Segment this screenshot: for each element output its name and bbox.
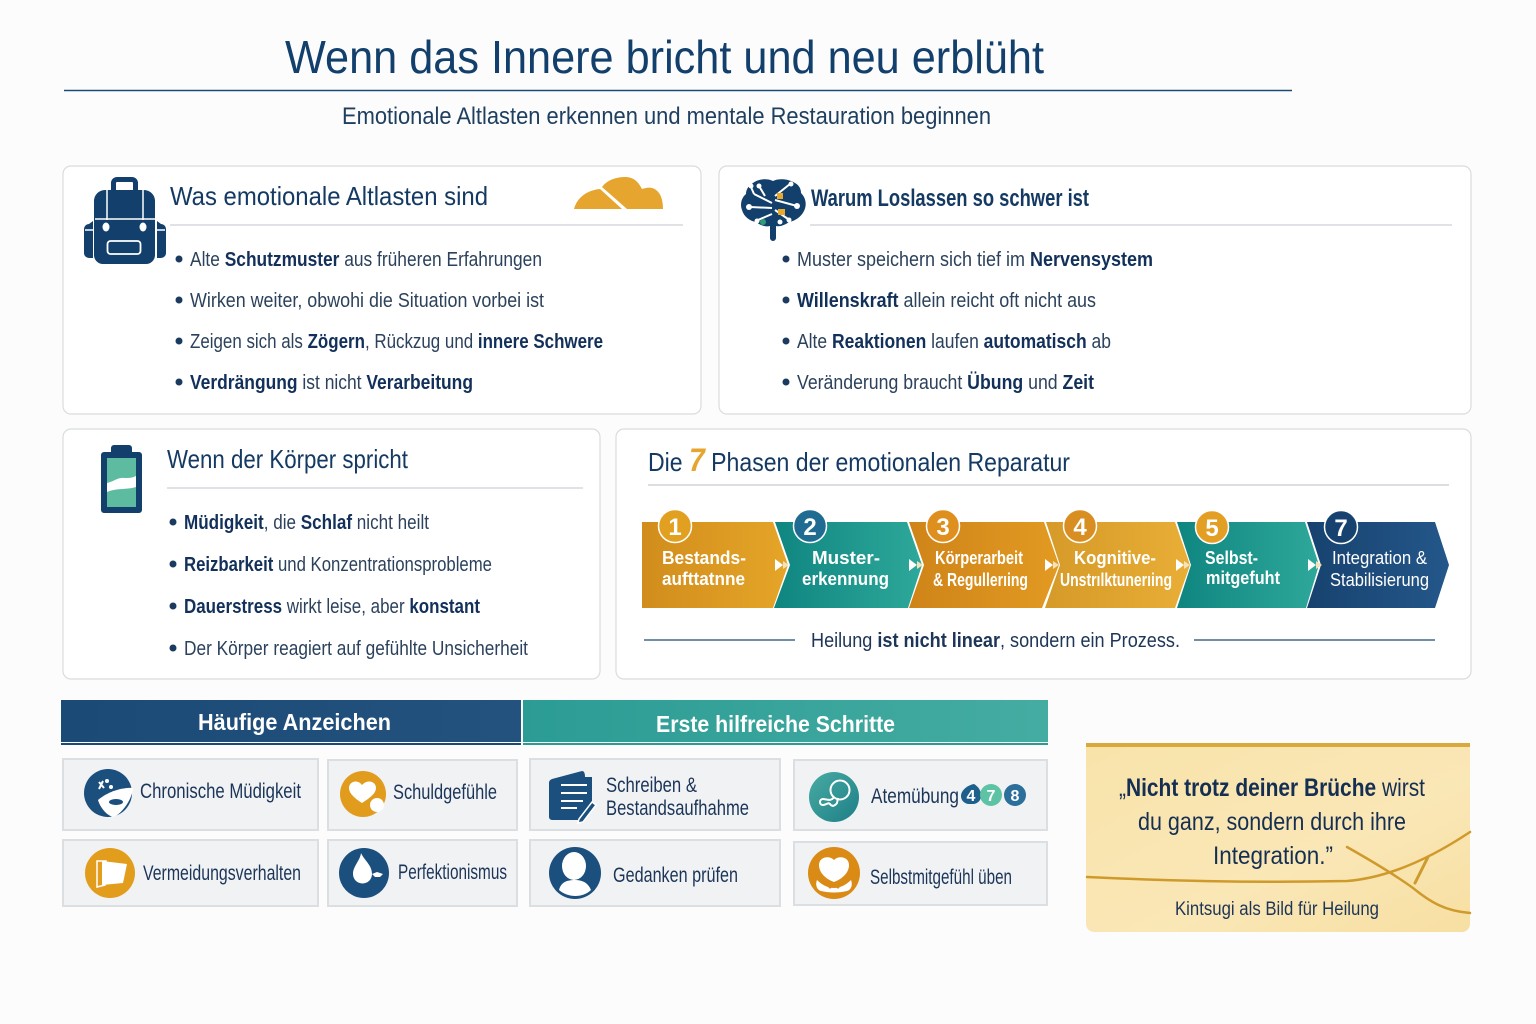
bullet list: Alte Schutzmuster aus früheren Erfahrungen (190, 249, 542, 271)
heading: Die 7 Phasen der emotionalen Reparatur (648, 442, 1070, 478)
phase 2: erkennung (802, 569, 889, 589)
quote text: du ganz, sondern durch ihre (1138, 808, 1406, 836)
bullet list (782, 249, 1153, 394)
bullet list: Der Körper reagiert auf gefühlte Unsicherheit (184, 638, 528, 660)
phase 2: Muster- (812, 548, 880, 568)
header: Häufige Anzeichen (61, 700, 521, 745)
card: Atemübung 4-7-8: Atemübung (871, 785, 959, 808)
icon: brain (741, 179, 806, 241)
caption: Kintsugi als Bild für Heilung (1175, 899, 1379, 920)
panel: Die 7 Phasen der emotionalen Reparatur (616, 429, 1471, 679)
badges 4 7 8: 8 (1011, 788, 1020, 805)
bullet list: Muster speichern sich tief im Nervensystem (797, 249, 1153, 271)
arrows between phases (775, 559, 1322, 571)
badges 4 7 8 (961, 784, 1026, 806)
icon: notebook and pen (549, 771, 596, 823)
bullet list: Verdrängung ist nicht Verarbeitung (190, 372, 473, 394)
card: Schuldgefühle (328, 760, 517, 830)
note: Heilung ist nicht linear, sondern ein Prozess. (811, 630, 1180, 652)
phase 4: 4 (1073, 514, 1087, 541)
phase 2 (774, 510, 922, 608)
badges 4 7 8: 4 (967, 788, 976, 805)
phase 7 (1307, 510, 1449, 608)
phase 3: & Regullerıing (933, 570, 1028, 590)
phase 1: 1 (668, 514, 682, 541)
header: Häufige Anzeichen: Häufige Anzeichen (198, 709, 391, 735)
card: Atemübung 4-7-8 (794, 760, 1047, 830)
card: Schreiben & Bestandsaufnahme: Bestandsaufhahme (606, 797, 749, 820)
phase 5: 5 (1205, 515, 1219, 542)
icon: breath (809, 772, 859, 822)
icon: battery (101, 445, 142, 513)
icon: person (549, 847, 601, 899)
title: Wenn das Innere bricht und neu erblüht (285, 31, 1044, 83)
bullet list (170, 512, 528, 660)
card: Gedanken prüfen: Gedanken prüfen (613, 864, 738, 887)
bullet list: Willenskraft allein reicht oft nicht aus (797, 290, 1096, 312)
phase 3: 3 (936, 514, 950, 541)
header: Erste hilfreiche Schritte: Erste hilfreiche Schritte (656, 711, 895, 737)
quote text (1119, 774, 1425, 870)
icon: heart in hands (808, 847, 860, 899)
phase 7: 7 (1334, 515, 1348, 542)
icon: folder (85, 848, 135, 898)
phase 2: 2 (803, 514, 817, 541)
kintsugi cracks (1087, 832, 1470, 913)
bullet list: Veränderung braucht Übung und Zeit (797, 371, 1094, 394)
icon: heart (340, 771, 386, 817)
card: Schreiben & Bestandsaufnahme: Schreiben & (606, 774, 697, 797)
phase 1: Bestands- (662, 548, 746, 568)
icon: backpack (84, 177, 166, 264)
card: Chronische Müdigkeit: Chronische Müdigkeit (140, 780, 301, 803)
phase 5: Selbst- (1205, 548, 1258, 568)
header: Erste hilfreiche Schritte (523, 700, 1048, 745)
panel: Kintsugi quote (1086, 743, 1470, 932)
card: Selbstmitgefühl üben: Selbstmitgefühl üben (870, 866, 1012, 889)
card: Perfektionismus (328, 840, 517, 906)
phase 4: Kognitive- (1074, 548, 1156, 568)
phase 7: Integration & (1332, 548, 1427, 568)
subtitle: Emotionale Altlasten erkennen und mentale Restauration beginnen (342, 103, 991, 130)
heading: Warum Loslassen so schwer ist (811, 185, 1089, 212)
quote text: „Nicht trotz deiner Brüche wirst (1119, 774, 1425, 802)
quote text: Integration.” (1213, 842, 1333, 870)
bullet list: Dauerstress wirkt leise, aber konstant (184, 596, 480, 618)
icon: drop (339, 848, 389, 898)
bullet list: Wirken weiter, obwohi die Situation vorbei ist (190, 290, 544, 312)
icon: tired eye (84, 769, 133, 817)
icon: golden cloud (574, 177, 663, 209)
bullet list: Reizbarkeit und Konzentrationsprobleme (184, 554, 492, 576)
phase 5: mitgefuht (1206, 568, 1280, 588)
bullet list (176, 249, 603, 394)
card: Schreiben & Bestandsaufnahme (530, 759, 780, 830)
phase 1: aufttatnne (662, 569, 745, 589)
phase 7: Stabilisierung (1330, 570, 1429, 590)
card: Perfektionismus: Perfektionismus (398, 861, 507, 884)
phase 4: Unstrılktunerıing (1060, 570, 1172, 590)
phase 3 (909, 510, 1059, 608)
bullet list: Alte Reaktionen laufen automatisch ab (797, 331, 1111, 353)
phase 5 (1177, 510, 1319, 608)
card: Vermeidungsverhalten: Vermeidungsverhalten (143, 862, 301, 885)
card: Vermeidungsverhalten (63, 840, 318, 906)
phase 4 (1045, 510, 1190, 608)
card: Schuldgefühle: Schuldgefühle (393, 781, 497, 804)
phase 1 (642, 510, 788, 608)
phase 3: Körperarbeit (935, 548, 1023, 568)
card: Gedanken prüfen (530, 840, 780, 906)
card: Selbstmitgefühl üben (794, 842, 1047, 905)
card: Chronische Müdigkeit (63, 759, 318, 830)
bullet list: Zeigen sich als Zögern, Rückzug und innere Schwere (190, 331, 603, 353)
heading: Was emotionale Altlasten sind (170, 181, 488, 211)
heading: Wenn der Körper spricht (167, 444, 409, 474)
badges 4 7 8: 7 (987, 788, 996, 805)
bullet list: Müdigkeit, die Schlaf nicht heilt (184, 512, 429, 534)
panel: Wenn der Körper spricht (63, 429, 600, 679)
panel: Warum Loslassen so schwer ist (719, 166, 1471, 414)
panel: Was emotionale Altlasten sind (63, 166, 701, 414)
